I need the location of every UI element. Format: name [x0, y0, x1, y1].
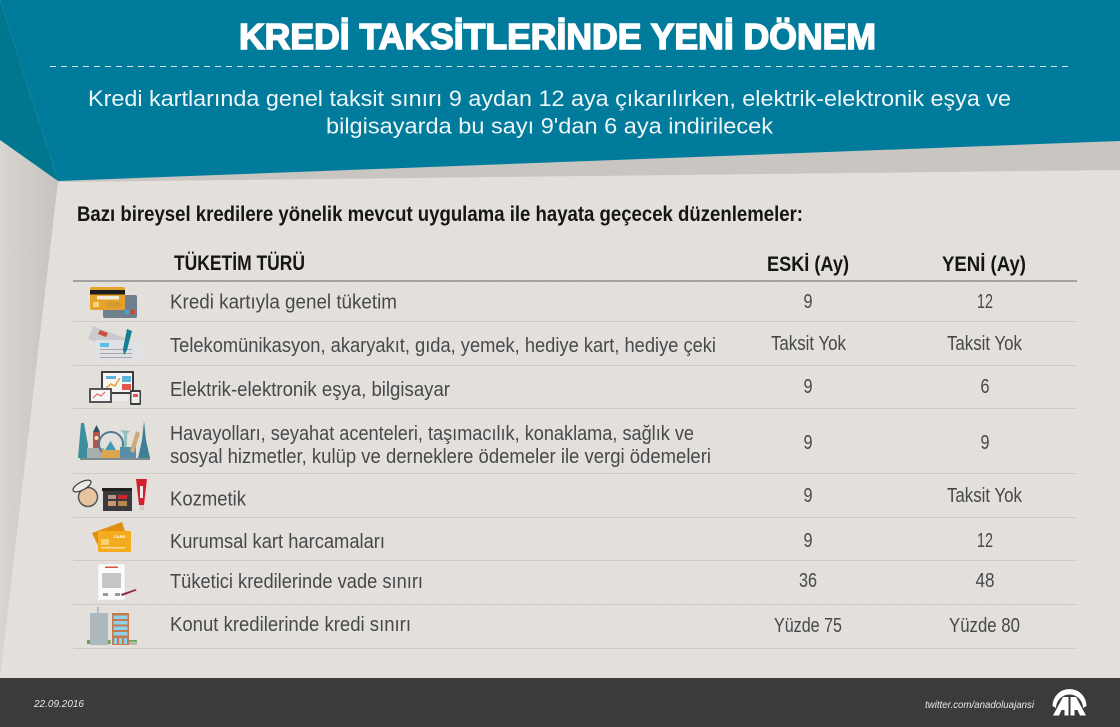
row: tüketici: Tüketici kredilerinde vade sınırı — [170, 571, 423, 593]
icon: cosmetics — [71, 478, 147, 511]
row: kozmetik — [170, 485, 1023, 510]
row: telekomünikasyon: Telekomünikasyon, akaryakıt, gıda, yemek, hediye kart, hediye çeki — [170, 335, 716, 357]
row: havayolları: sosyal hizmetler, kulüp ve derneklere ödemeler ile vergi ödemeleri — [170, 446, 711, 468]
icon: devices — [89, 371, 141, 405]
icon: checks and pen — [88, 326, 142, 361]
date: 22.09.2016 — [33, 699, 84, 710]
logo: AA — [1052, 689, 1086, 716]
shadow band under header — [58, 141, 1120, 182]
subtitle: Kredi kartlarında genel taksit sınırı 9 aydan 12 aya çıkarılırken, elektrik-elektronik eşya ve — [88, 86, 1011, 111]
row: telekomünikasyon — [170, 333, 1023, 357]
row: elektronik: 9 — [804, 376, 812, 398]
row: tüketici: 48 — [976, 570, 994, 592]
row: kredi kartı: 12 — [977, 291, 993, 313]
row: kozmetik: 9 — [804, 485, 812, 507]
row: havayolları — [170, 423, 990, 468]
row: havayolları: Havayolları, seyahat acenteleri, taşımacılık, konaklama, sağlık ve — [170, 423, 694, 445]
table header — [174, 252, 1026, 276]
icon: contract document — [98, 564, 136, 600]
row: konut: Yüzde 75 — [774, 615, 842, 637]
row: kurumsal: 9 — [804, 530, 812, 552]
row: konut — [170, 614, 1020, 637]
left wall — [0, 140, 58, 678]
row: konut: Yüzde 80 — [949, 615, 1020, 637]
row: kurumsal: 12 — [977, 530, 993, 552]
table — [73, 252, 1077, 648]
row: havayolları: 9 — [980, 432, 990, 454]
row: telekomünikasyon: Taksit Yok — [771, 333, 847, 355]
table header: YENİ (Ay) — [942, 253, 1026, 276]
row: telekomünikasyon: Taksit Yok — [947, 333, 1023, 355]
row: kredi kartı: Kredi kartıyla genel tüketim — [170, 292, 397, 314]
row: elektronik: Elektrik-elektronik eşya, bilgisayar — [170, 379, 450, 401]
table header: ESKİ (Ay) — [767, 253, 849, 276]
header banner — [0, 0, 1120, 181]
row: kurumsal — [170, 530, 993, 553]
row: elektronik — [170, 376, 990, 401]
row: konut: Konut kredilerinde kredi sınırı — [170, 614, 411, 636]
row: kozmetik: Kozmetik — [170, 488, 247, 510]
row: kredi kartı — [170, 291, 993, 314]
row: kurumsal: Kurumsal kart harcamaları — [170, 531, 385, 553]
footer bar — [0, 678, 1120, 727]
row: havayolları: 9 — [804, 432, 812, 454]
subtitle — [88, 86, 1011, 138]
icon: corporate cards: CARD — [114, 534, 126, 539]
section heading: Bazı bireysel kredilere yönelik mevcut uygulama ile hayata geçecek düzenlemeler: — [77, 203, 803, 226]
row: elektronik: 6 — [980, 376, 990, 398]
icon: buildings — [87, 607, 137, 645]
icon: credit cards — [90, 287, 137, 318]
twitter handle: twitter.com/anadoluajansi — [925, 699, 1035, 711]
title: KREDİ TAKSİTLERİNDE YENİ DÖNEM — [239, 16, 876, 57]
table header: TÜKETİM TÜRÜ — [174, 252, 305, 275]
icon: corporate cards — [92, 522, 131, 552]
row: kredi kartı: 9 — [804, 291, 812, 313]
row: tüketici — [170, 570, 994, 593]
subtitle: bilgisayarda bu sayı 9'dan 6 aya indirilecek — [326, 114, 774, 138]
row: kozmetik: Taksit Yok — [947, 485, 1023, 507]
icon: world landmarks — [78, 421, 150, 460]
row: tüketici: 36 — [799, 570, 817, 592]
